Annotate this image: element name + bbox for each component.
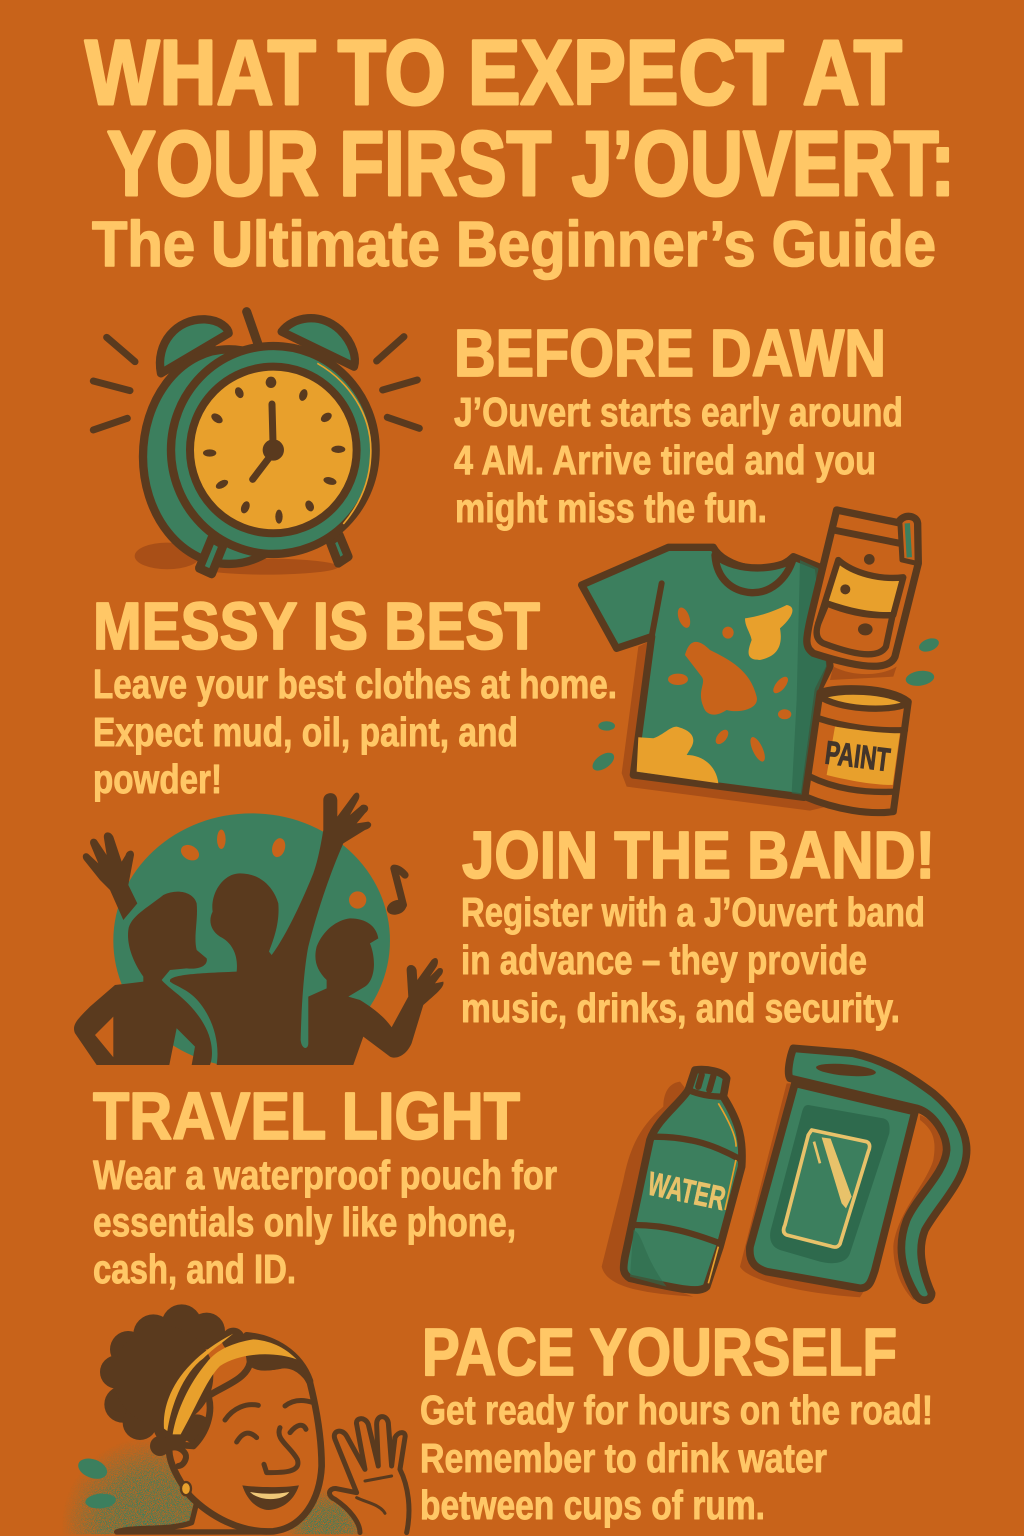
features <box>225 1400 313 1473</box>
text: messy is best <box>93 589 617 802</box>
headband <box>164 1334 297 1434</box>
text: before dawn <box>454 316 903 531</box>
body <box>461 889 925 1031</box>
face <box>169 1363 322 1531</box>
waving hand <box>329 1417 409 1533</box>
can label: PAINT <box>823 734 892 778</box>
body: Expect mud, oil, paint, and <box>93 709 518 755</box>
icon: water bottle and waterproof pouch <box>602 1048 967 1300</box>
bottle label: WATER <box>644 1166 729 1218</box>
icon: stained t-shirt, jar and paint can <box>582 510 941 813</box>
title line 1: WHAT TO EXPECT AT <box>85 22 902 124</box>
green drips <box>589 636 941 774</box>
icon: alarm clock <box>93 312 419 575</box>
body <box>93 661 617 802</box>
pouch <box>750 1048 967 1300</box>
body: J’Ouvert starts early around <box>454 389 903 435</box>
shoulder and neck <box>117 1503 267 1532</box>
icon: crowd silhouette <box>74 793 444 1068</box>
body: in advance – they provide <box>461 937 867 983</box>
ear <box>172 1447 186 1466</box>
title <box>85 22 955 280</box>
phone <box>784 1130 870 1247</box>
body <box>93 1152 557 1292</box>
body: might miss the fun. <box>455 485 767 531</box>
body: Register with a J’Ouvert band <box>461 889 925 935</box>
body: Wear a waterproof pouch for <box>93 1152 557 1198</box>
body: essentials only like phone, <box>93 1199 516 1245</box>
body: Leave your best clothes at home. <box>93 661 617 707</box>
body: Remember to drink water <box>420 1435 827 1481</box>
text: pace yourself <box>420 1315 933 1528</box>
body <box>420 1387 933 1528</box>
body: music, drinks, and security. <box>461 985 900 1031</box>
subtitle: The Ultimate Beginner’s Guide <box>92 208 936 280</box>
body: between cups of rum. <box>420 1482 765 1528</box>
heading: BEFORE DAWN <box>454 316 886 391</box>
music note <box>385 868 408 917</box>
heading: PACE YOURSELF <box>422 1315 897 1390</box>
icon: smiling woman waving <box>62 1304 409 1534</box>
bottle <box>624 1070 742 1290</box>
text: travel light <box>93 1079 557 1292</box>
heading: TRAVEL LIGHT <box>93 1079 520 1154</box>
body <box>454 389 903 531</box>
paint splats <box>637 605 792 783</box>
body: powder! <box>93 756 222 802</box>
hair <box>100 1304 246 1456</box>
heading: JOIN THE BAND! <box>462 818 935 893</box>
jar <box>807 510 918 680</box>
paint can <box>805 689 908 813</box>
body: 4 AM. Arrive tired and you <box>454 437 876 483</box>
heading: MESSY IS BEST <box>93 589 540 664</box>
text: join the band <box>461 818 935 1031</box>
body: cash, and ID. <box>93 1246 296 1292</box>
